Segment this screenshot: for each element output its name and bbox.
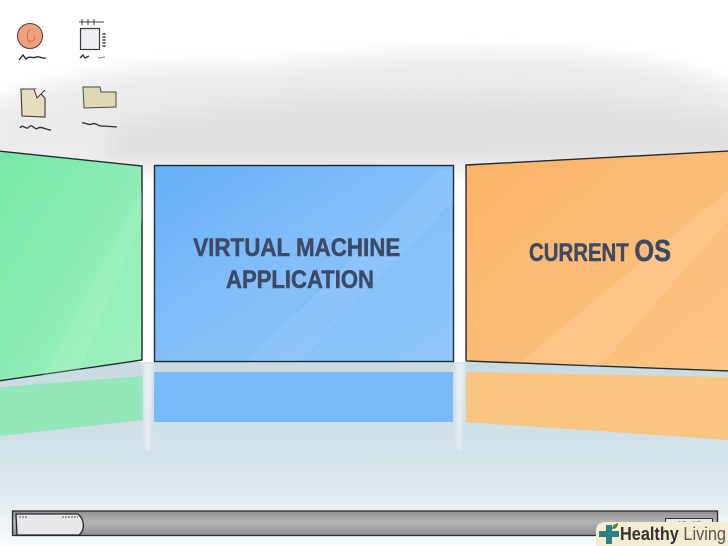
taskbar: [12, 511, 718, 536]
window pillars: [143, 362, 465, 450]
icon: teal cross: [599, 523, 619, 544]
start button: [16, 514, 83, 535]
clock: [666, 518, 712, 536]
logo: healthy living: [596, 522, 728, 546]
floor: [0, 362, 728, 546]
heading: current os: CURRENT OS: [529, 233, 671, 268]
logo: healthy living: Healthy Living: [620, 524, 726, 544]
panel: virtual machine application window: [154, 166, 454, 362]
panel: current os window: [466, 151, 728, 371]
icon: file: [20, 89, 51, 130]
icon: document with notes: [79, 19, 105, 58]
reflection: green: [0, 376, 143, 436]
icon: orange disc: [18, 24, 46, 60]
panel: green window: [0, 151, 142, 381]
grey wall haze: [0, 53, 728, 170]
icon: folder: [82, 87, 117, 127]
heading: virtual machine application: APPLICATION: [226, 266, 374, 294]
heading: virtual machine application: VIRTUAL MACHINE: [193, 234, 400, 262]
clock: 05:35: [677, 521, 701, 530]
reflection: orange: [466, 372, 728, 440]
reflection: blue: [154, 372, 453, 422]
